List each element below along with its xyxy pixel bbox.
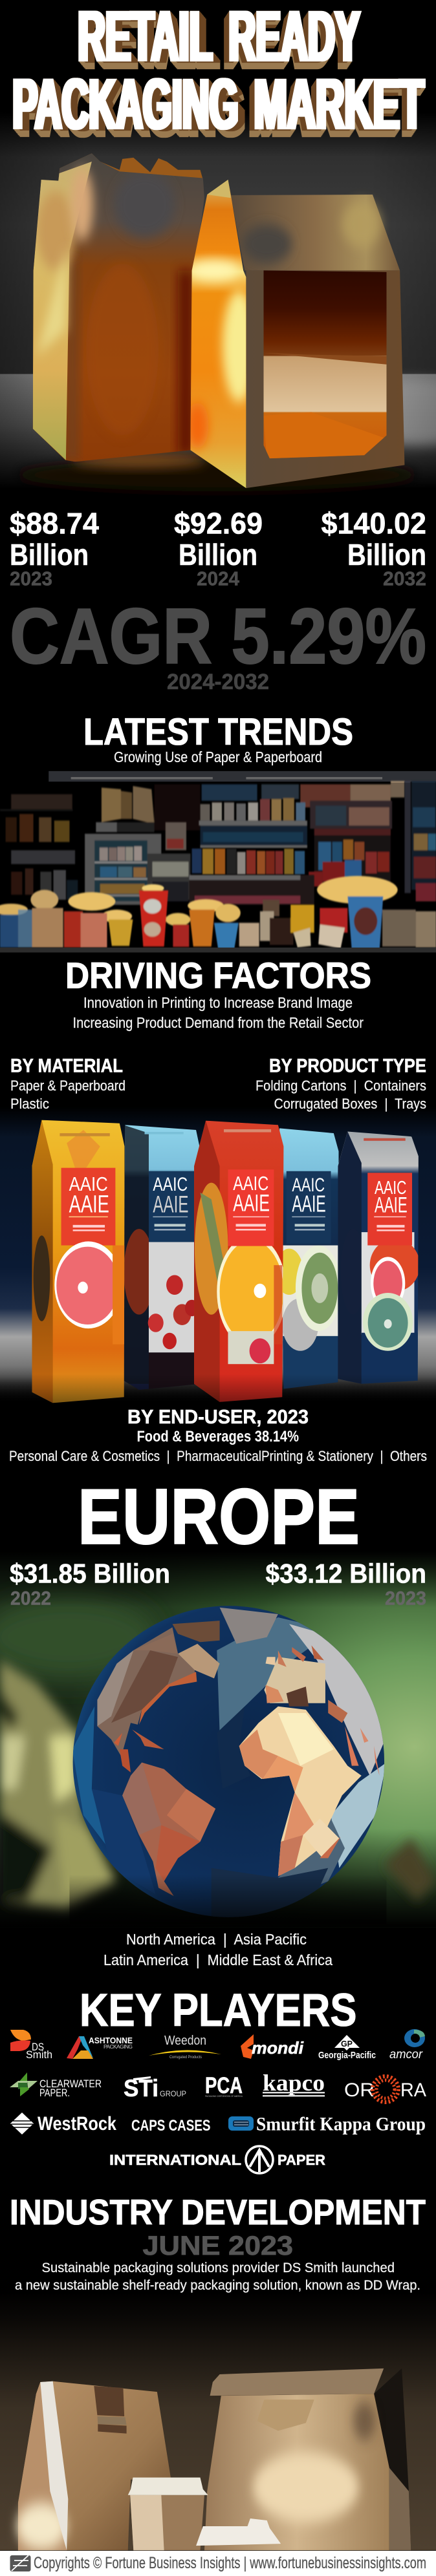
driving factors: DRIVING FACTORS: [65, 955, 371, 997]
box 4 blue kiwi: AAIE: [292, 1191, 326, 1217]
latest trends heading: LATEST TRENDS: [83, 711, 353, 753]
europe values: [10, 1558, 426, 1610]
box 5 navy: [336, 1130, 420, 1387]
store image: [0, 771, 436, 952]
blurred background shapes: [0, 1660, 436, 1908]
latest trends heading: Growing Use of Paper & Paperboard: [114, 749, 322, 765]
logo: Ashtonne Packaging: ASHTONNE: [89, 2036, 133, 2045]
logo: STi Group: STi: [124, 2075, 158, 2102]
footer: [0, 2551, 436, 2576]
right shelves: [309, 781, 436, 901]
logo: Caps Cases: CAPS CASES: [131, 2117, 211, 2134]
packaging boxes image: [0, 1113, 436, 1403]
industry development: a new sustainable shelf-ready packaging solution, known as DD Wrap.: [15, 2278, 420, 2293]
logo: Ashtonne Packaging: [67, 2036, 133, 2059]
industry development: [10, 2192, 426, 2293]
CAGR: 2024-2032: [167, 670, 269, 694]
logo: WestRock: WestRock: [38, 2113, 116, 2134]
cereal boxes: [96, 784, 200, 832]
europe values: 2022: [10, 1588, 51, 1610]
box 2 blue: AAIC: [153, 1173, 188, 1195]
footer logo: [10, 2555, 31, 2571]
coffee cup: [128, 2478, 208, 2550]
box 4 blue kiwi: AAIC: [292, 1174, 325, 1195]
south america: [122, 1763, 215, 1896]
right bag: [204, 2368, 411, 2550]
stat 2032: $140.02: [321, 507, 426, 540]
middle bottles row: [192, 849, 305, 875]
logo: Georgia-Pacific: GP: [341, 2039, 353, 2049]
europe: [264, 1657, 325, 1703]
counter: [189, 875, 314, 904]
logo: mondi: [241, 2034, 304, 2059]
europe heading: EUROPE: [78, 1473, 360, 1560]
by end-user: BY END-USER, 2023: [127, 1405, 309, 1428]
title: PACKAGING: [13, 65, 238, 144]
by material: BY MATERIAL: [10, 1055, 123, 1077]
europe values: $33.12 Billion: [265, 1558, 426, 1589]
key players heading: KEY PLAYERS: [80, 1985, 357, 2036]
logo: WestRock: [10, 2113, 116, 2134]
popcorn and containers: [0, 876, 436, 950]
logo: Georgia-Pacific: Georgia-Pacific: [318, 2050, 376, 2061]
logo: Weedon: Corrugated Products: [169, 2056, 202, 2060]
by end-user: [9, 1405, 427, 1464]
logo: Kapco: kapco: [263, 2070, 325, 2096]
logo: Clearwater Paper: [10, 2072, 102, 2099]
europe values: 2023: [385, 1588, 426, 1610]
logo: Orora: RA: [400, 2080, 426, 2101]
left shelves: [0, 794, 78, 900]
by material: Paper & Paperboard: [10, 1078, 125, 1094]
stat 2023: 2023: [10, 568, 52, 590]
logo: Clearwater Paper: CLEARWATER: [39, 2078, 102, 2090]
box 4 blue kiwi: [279, 1128, 339, 1389]
by end-user: Food & Beverages 38.14%: [137, 1428, 299, 1445]
logo: DS Smith: DS: [32, 2041, 44, 2053]
logo: Weedon: Weedon: [164, 2034, 206, 2048]
logo: amcor: [389, 2029, 425, 2061]
stat 2032: Billion: [347, 538, 426, 571]
logo: Weedon: [149, 2034, 221, 2060]
stat 2032: 2032: [383, 568, 426, 590]
logo: International Paper: INTERNATIONAL: [109, 2152, 241, 2168]
globe: [69, 1604, 386, 1921]
logo: DS Smith: [10, 2030, 52, 2061]
logo: amcor: amcor: [389, 2048, 423, 2061]
box 1 yellow grapefruit: AAIC: [69, 1173, 108, 1195]
by product type: [256, 1055, 426, 1112]
logo: Georgia-Pacific: [318, 2035, 376, 2061]
box 5 navy: AAIE: [375, 1192, 408, 1217]
stat 2023: $88.74: [10, 507, 99, 540]
stat 2023: Billion: [10, 538, 89, 571]
by material: [10, 1055, 125, 1112]
hero image: paper bags: [0, 120, 436, 495]
latest trends heading: [83, 711, 353, 765]
logo: Ashtonne Packaging: PACKAGING: [104, 2043, 133, 2050]
logo: STi Group: [124, 2075, 186, 2102]
globe image: [0, 1551, 436, 1928]
box 3 red orange: [192, 1118, 287, 1405]
driving factors: [65, 955, 371, 1031]
box 3 red orange: AAIE: [233, 1190, 270, 1217]
box 1 yellow grapefruit: AAIE: [69, 1191, 109, 1218]
driving factors: Increasing Product Demand from the Retail Sector: [72, 1014, 364, 1031]
logo: International Paper: PAPER: [278, 2152, 325, 2168]
logo: Smurfit Kappa Group: Smurfit Kappa Group: [256, 2114, 426, 2134]
logo: STi Group: GROUP: [160, 2089, 186, 2098]
box 2 blue: AAIE: [153, 1191, 188, 1218]
other regions: North America | Asia Pacific: [126, 1931, 307, 1948]
right bag: [186, 178, 404, 490]
box 5 navy: AAIC: [375, 1177, 406, 1198]
bottom image: paper bags and cups: [0, 2292, 436, 2550]
market size stats: [10, 507, 426, 590]
title: [13, 0, 424, 144]
left bag: [28, 152, 212, 468]
sea facets: [217, 1617, 323, 1730]
stat 2024: $92.69: [174, 507, 263, 540]
north america: [97, 1628, 195, 1756]
logo: PCA: PACKAGING CORPORATION OF AMERICA: [205, 2094, 243, 2098]
industry development: JUNE 2023: [142, 2230, 293, 2261]
logo: mondi: mondi: [252, 2038, 304, 2058]
other regions: [104, 1931, 332, 1968]
stat 2024: 2024: [197, 568, 240, 590]
box 1 yellow grapefruit: [28, 1117, 128, 1407]
stat 2032: [321, 507, 426, 590]
other regions: Latin America | Middle East & Africa: [104, 1952, 332, 1968]
logo: Clearwater Paper: PAPER.: [39, 2087, 70, 2099]
driving factors: Innovation in Printing to Increase Brand Image: [83, 994, 353, 1011]
europe values: $31.85 Billion: [10, 1558, 170, 1589]
box 2 blue: [122, 1123, 203, 1394]
africa: [239, 1707, 362, 1877]
small cup lid: [196, 2518, 281, 2546]
logo: Orora: [344, 2076, 426, 2102]
logo: DS Smith: Smith: [26, 2049, 52, 2061]
fridge: [85, 822, 190, 904]
upper panels and bottles: [199, 781, 404, 848]
box 3 red orange: AAIC: [233, 1172, 268, 1194]
logo: PCA: PCA: [205, 2073, 243, 2098]
logo: International Paper: [109, 2146, 325, 2173]
logo: Orora: OR: [344, 2080, 375, 2101]
stat 2024: [174, 507, 263, 590]
by material: Plastic: [10, 1096, 49, 1112]
left bag: [17, 2381, 171, 2550]
stat 2024: Billion: [179, 538, 257, 571]
stat 2023: [10, 507, 99, 590]
industry development: Sustainable packaging solutions provider DS Smith launched: [41, 2261, 395, 2275]
